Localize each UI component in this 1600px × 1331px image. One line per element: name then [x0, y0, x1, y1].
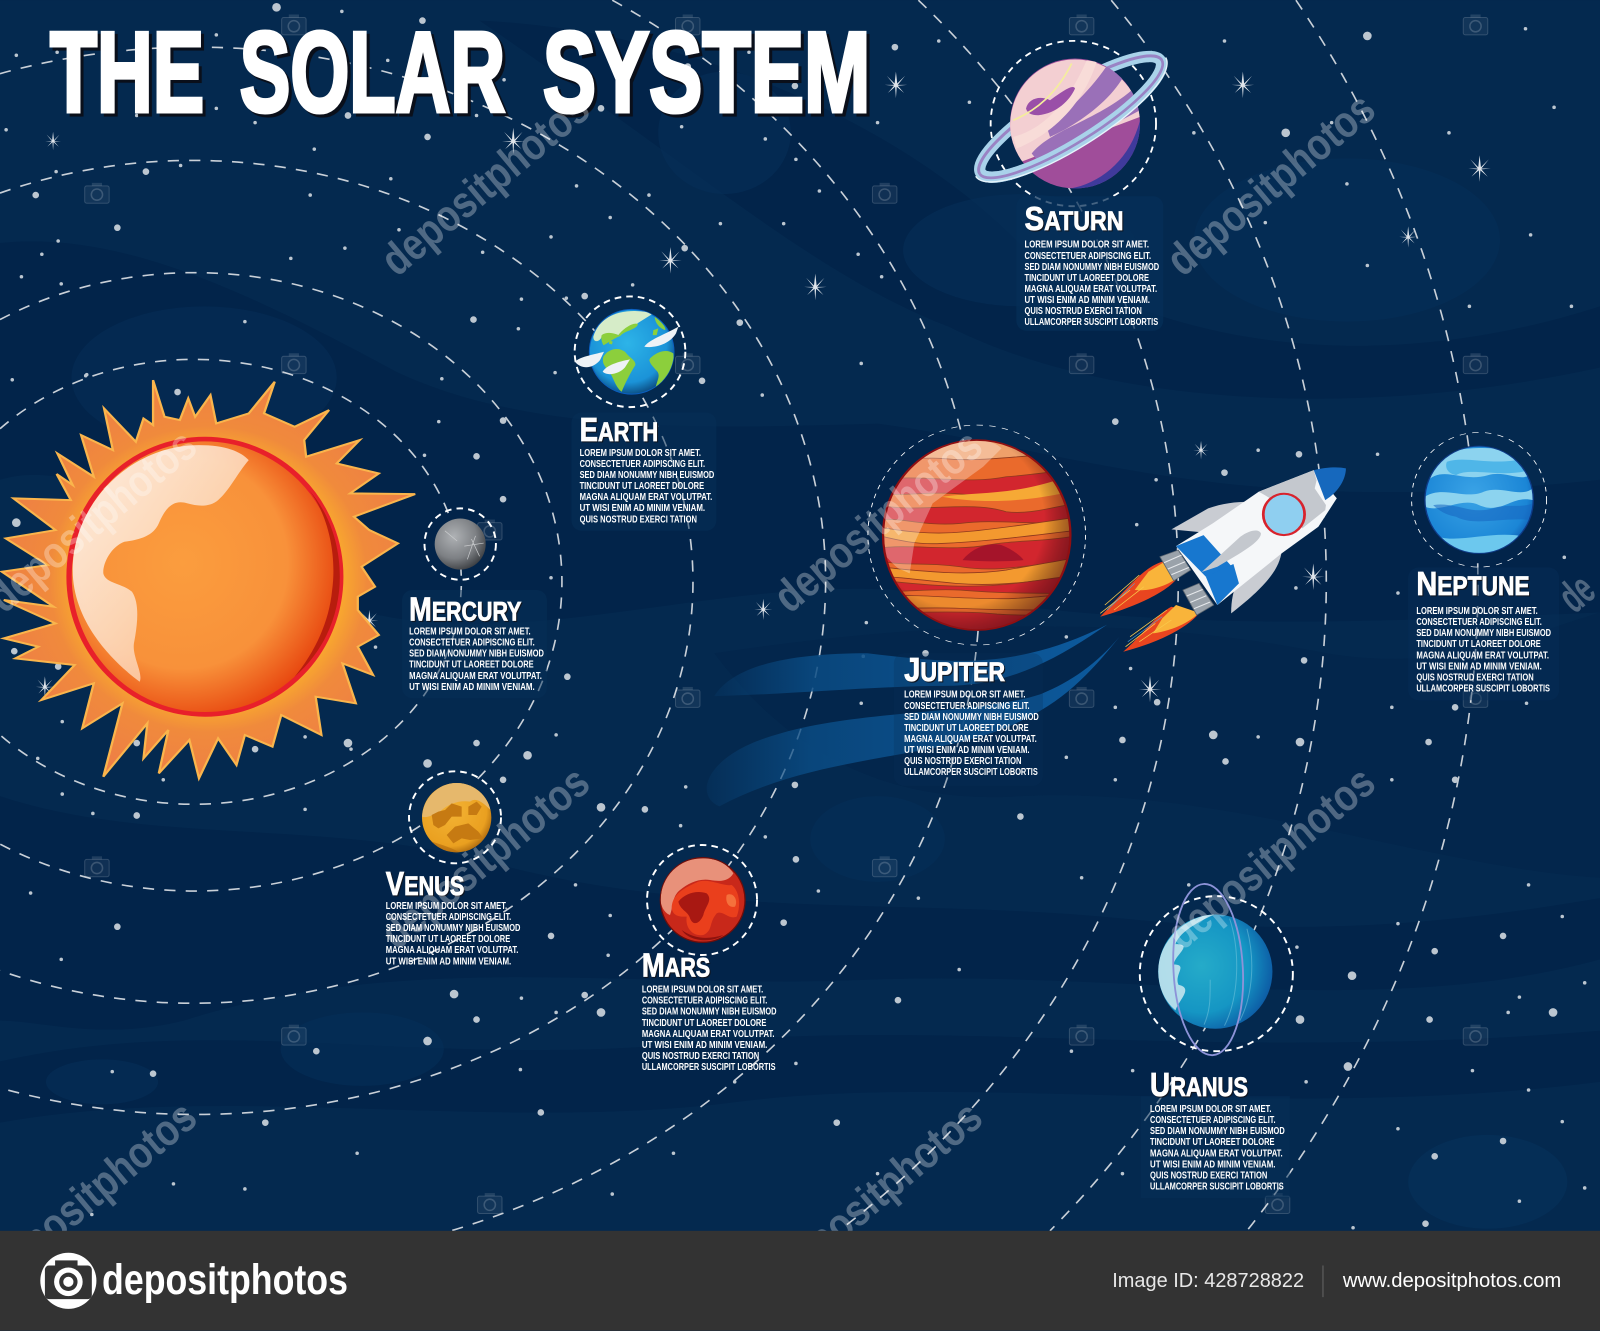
text block: Mars: [642, 985, 777, 1073]
heading: Earth: EARTH: [580, 412, 658, 449]
text block: Uranus: TINCIDUNT UT LAOREET DOLORE: [1150, 1137, 1275, 1148]
panel: Earth: [571, 296, 716, 531]
icon: rocket: [1100, 467, 1346, 652]
text block: Saturn: LOREM IPSUM DOLOR SIT AMET.: [1024, 240, 1149, 251]
panel: Saturn: [974, 40, 1168, 330]
icon: Saturn planet with rings: [974, 40, 1168, 208]
text block: Mercury: MAGNA ALIQUAM ERAT VOLUTPAT.: [409, 671, 542, 682]
text block: Venus: [386, 901, 520, 967]
icon: depositphotos camera logo: [40, 1253, 96, 1309]
footer banner: [0, 1231, 1600, 1331]
panel: Mars: [642, 845, 777, 1073]
icon: Venus planet: [409, 771, 501, 863]
text block: Neptune: SED DIAM NONUMMY NIBH EUISMOD: [1416, 628, 1551, 639]
text block: Neptune: [1416, 606, 1551, 695]
text block: Venus: MAGNA ALIQUAM ERAT VOLUTPAT.: [386, 945, 518, 956]
heading: Mars: MARS: [642, 948, 710, 985]
text block: Jupiter: QUIS NOSTRUD EXERCI TATION: [904, 756, 1021, 767]
text block: Earth: UT WISI ENIM AD MINIM VENIAM.: [580, 503, 705, 514]
text block: Saturn: SED DIAM NONUMMY NIBH EUISMOD: [1024, 262, 1159, 273]
text block: Saturn: UT WISI ENIM AD MINIM VENIAM.: [1024, 295, 1150, 306]
icon: Jupiter planet: [868, 425, 1086, 645]
title: THE: [50, 9, 204, 136]
icon: Earth planet: [575, 296, 685, 407]
text block: Jupiter: MAGNA ALIQUAM ERAT VOLUTPAT.: [904, 734, 1037, 745]
icon: Mercury planet: [424, 508, 496, 580]
title: [50, 9, 870, 136]
camera watermark icons: [85, 14, 1488, 1213]
diagonal watermarks: depositphotos: [763, 419, 992, 622]
text block: Uranus: QUIS NOSTRUD EXERCI TATION: [1150, 1170, 1267, 1181]
sun: [2, 380, 415, 778]
text block: Neptune: QUIS NOSTRUD EXERCI TATION: [1416, 673, 1534, 684]
icon: Neptune planet: [1412, 432, 1547, 567]
text block: Earth: CONSECTETUER ADIPISCING ELIT.: [580, 459, 705, 470]
text block: Mars: ULLAMCORPER SUSCIPIT LOBORTIS: [642, 1062, 776, 1073]
text block: Neptune: CONSECTETUER ADIPISCING ELIT.: [1416, 617, 1542, 628]
title: SOLAR: [240, 9, 505, 136]
text block: Jupiter: ULLAMCORPER SUSCIPIT LOBORTIS: [904, 767, 1038, 778]
text block: Venus: SED DIAM NONUMMY NIBH EUISMOD: [386, 923, 520, 934]
text block: Mercury: UT WISI ENIM AD MINIM VENIAM.: [409, 682, 535, 693]
icon: Uranus planet with thin ring: [1140, 882, 1293, 1057]
text block: Mars: UT WISI ENIM AD MINIM VENIAM.: [642, 1040, 767, 1051]
text block: Earth: [580, 448, 714, 525]
icon: Mars planet: [647, 845, 757, 955]
text block: Earth: QUIS NOSTRUD EXERCI TATION: [580, 514, 697, 525]
diagonal watermarks: depositphotos: [371, 756, 599, 959]
text block: Neptune: ULLAMCORPER SUSCIPIT LOBORTIS: [1416, 684, 1550, 695]
panel: Venus: [386, 771, 520, 967]
heading: Venus: VENUS: [386, 866, 464, 903]
text block: Neptune: TINCIDUNT UT LAOREET DOLORE: [1416, 639, 1541, 650]
text block: Mars: QUIS NOSTRUD EXERCI TATION: [642, 1051, 759, 1062]
text block: Uranus: UT WISI ENIM AD MINIM VENIAM.: [1150, 1159, 1276, 1170]
text block: Saturn: CONSECTETUER ADIPISCING ELIT.: [1024, 251, 1151, 262]
image id: Image ID: 428728822: [1112, 1270, 1304, 1292]
text block: Jupiter: SED DIAM NONUMMY NIBH EUISMOD: [904, 712, 1039, 723]
text block: Mars: SED DIAM NONUMMY NIBH EUISMOD: [642, 1007, 777, 1018]
text block: Earth: MAGNA ALIQUAM ERAT VOLUTPAT.: [580, 492, 712, 503]
text block: Earth: LOREM IPSUM DOLOR SIT AMET.: [580, 448, 701, 459]
text block: Venus: TINCIDUNT UT LAOREET DOLORE: [386, 934, 510, 945]
sparkle stars: [36, 72, 1491, 702]
heading: Uranus: URANUS: [1150, 1067, 1248, 1104]
text block: Jupiter: UT WISI ENIM AD MINIM VENIAM.: [904, 745, 1030, 756]
text block: Mars: MAGNA ALIQUAM ERAT VOLUTPAT.: [642, 1029, 775, 1040]
text block: Saturn: MAGNA ALIQUAM ERAT VOLUTPAT.: [1024, 284, 1157, 295]
text block: Saturn: [1024, 240, 1159, 328]
text block: Venus: UT WISI ENIM AD MINIM VENIAM.: [386, 956, 511, 967]
text block: Venus: LOREM IPSUM DOLOR SIT AMET.: [386, 901, 507, 912]
text block: Uranus: [1150, 1104, 1285, 1192]
logo wordmark: depositphotos: [102, 1256, 348, 1304]
text block: Mercury: LOREM IPSUM DOLOR SIT AMET.: [409, 626, 531, 637]
diagonal watermarks: depositphotos: [1156, 756, 1385, 959]
text block: Uranus: MAGNA ALIQUAM ERAT VOLUTPAT.: [1150, 1148, 1283, 1159]
text block: Mars: LOREM IPSUM DOLOR SIT AMET.: [642, 985, 763, 996]
text block: Neptune: LOREM IPSUM DOLOR SIT AMET.: [1416, 606, 1538, 617]
website url: www.depositphotos.com: [1342, 1270, 1561, 1292]
panel: Neptune: [1408, 432, 1559, 700]
text block: Saturn: TINCIDUNT UT LAOREET DOLORE: [1024, 273, 1149, 284]
text block: Earth: TINCIDUNT UT LAOREET DOLORE: [580, 481, 704, 492]
text block: Uranus: LOREM IPSUM DOLOR SIT AMET.: [1150, 1104, 1272, 1115]
text block: Neptune: MAGNA ALIQUAM ERAT VOLUTPAT.: [1416, 650, 1549, 661]
text block: Saturn: QUIS NOSTRUD EXERCI TATION: [1024, 306, 1142, 317]
title: SYSTEM: [543, 9, 870, 136]
panel: Mercury: [402, 508, 547, 698]
text block: Jupiter: TINCIDUNT UT LAOREET DOLORE: [904, 723, 1029, 734]
heading: Jupiter: JUPITER: [904, 652, 1005, 689]
diagonal watermarks: depositphotos: [763, 1091, 992, 1294]
text block: Mercury: SED DIAM NONUMMY NIBH EUISMOD: [409, 649, 544, 660]
diagonal watermarks: depositphotos: [1156, 82, 1385, 285]
heading: Neptune: NEPTUNE: [1416, 566, 1530, 603]
text block: Uranus: SED DIAM NONUMMY NIBH EUISMOD: [1150, 1126, 1285, 1137]
text block: Mercury: TINCIDUNT UT LAOREET DOLORE: [409, 660, 534, 671]
rocket exhaust trails: [707, 625, 1119, 806]
text block: Jupiter: LOREM IPSUM DOLOR SIT AMET.: [904, 690, 1026, 701]
text block: Uranus: CONSECTETUER ADIPISCING ELIT.: [1150, 1115, 1276, 1126]
text block: Venus: CONSECTETUER ADIPISCING ELIT.: [386, 912, 511, 923]
diagonal watermarks: depositphotos: [371, 82, 599, 285]
text block: Mars: TINCIDUNT UT LAOREET DOLORE: [642, 1018, 766, 1029]
text block: Uranus: ULLAMCORPER SUSCIPIT LOBORTIS: [1150, 1181, 1284, 1192]
text block: Jupiter: CONSECTETUER ADIPISCING ELIT.: [904, 701, 1030, 712]
heading: Saturn: SATURN: [1024, 201, 1123, 238]
text block: Mercury: CONSECTETUER ADIPISCING ELIT.: [409, 638, 535, 649]
text block: Neptune: UT WISI ENIM AD MINIM VENIAM.: [1416, 661, 1542, 672]
heading: Mercury: MERCURY: [409, 592, 522, 629]
text block: Earth: SED DIAM NONUMMY NIBH EUISMOD: [580, 470, 714, 481]
text block: Mars: CONSECTETUER ADIPISCING ELIT.: [642, 996, 767, 1007]
text block: Jupiter: [904, 690, 1039, 778]
text block: Saturn: ULLAMCORPER SUSCIPIT LOBORTIS: [1024, 317, 1158, 328]
text block: Mercury: [409, 626, 544, 693]
panel: Jupiter: [868, 425, 1086, 786]
panel: Uranus: [1140, 882, 1293, 1198]
